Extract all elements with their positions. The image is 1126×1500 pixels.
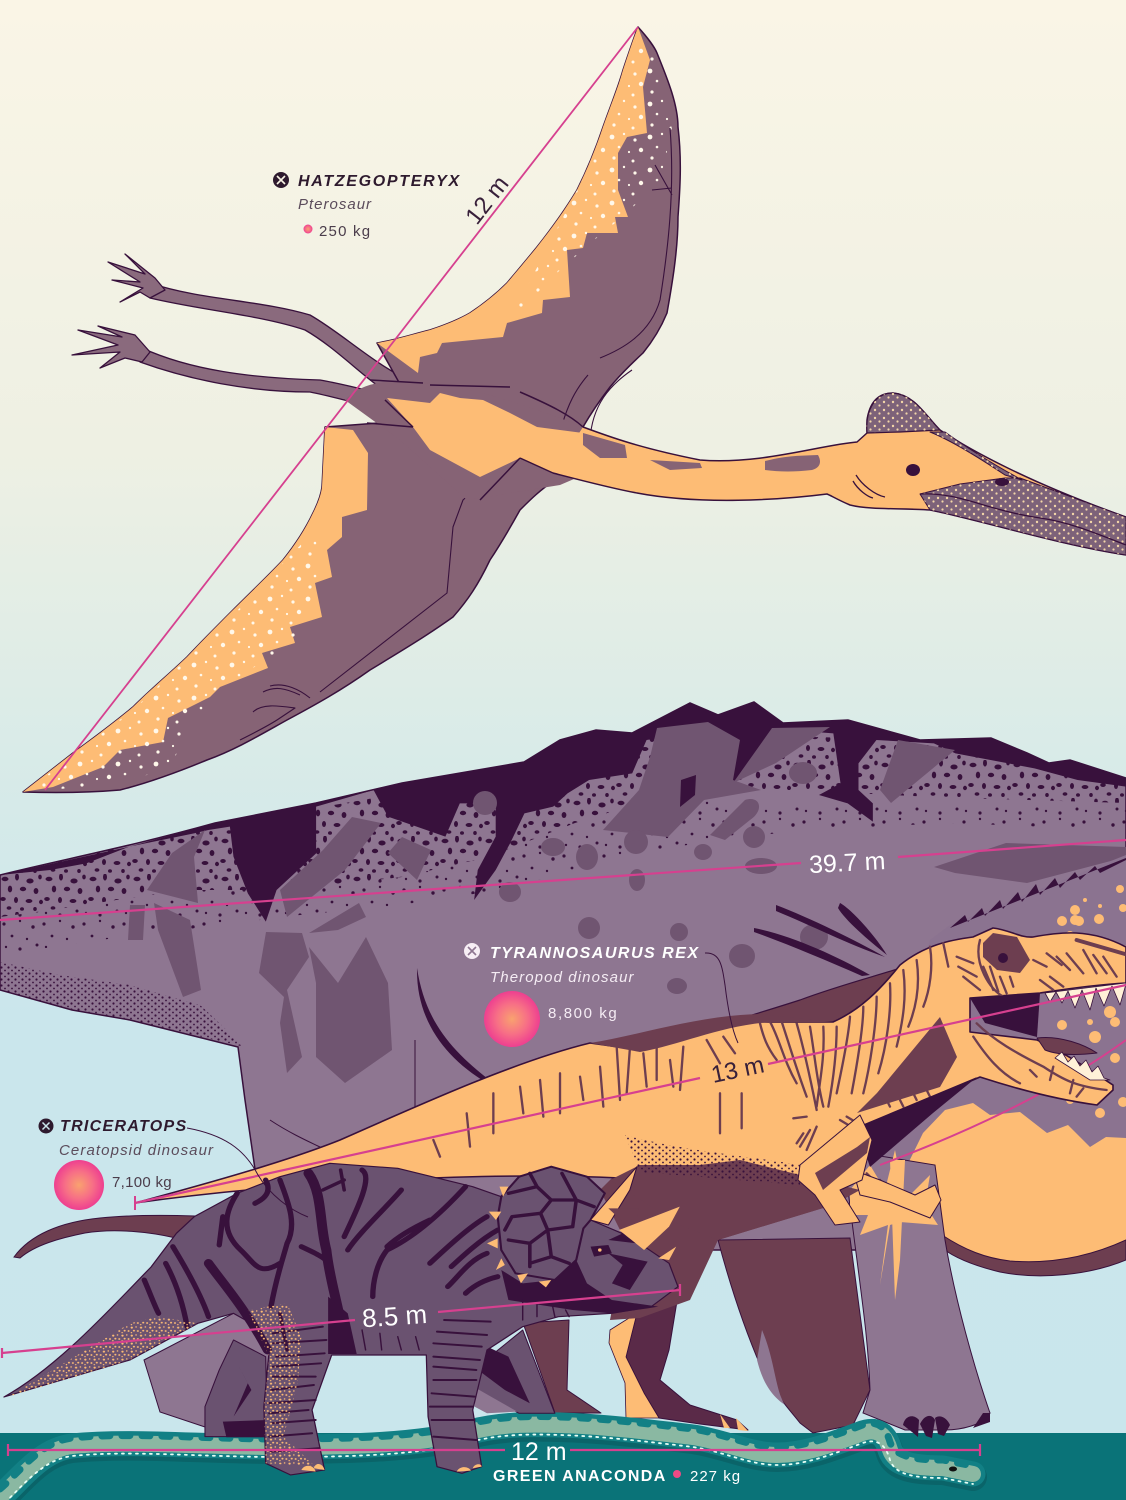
beak speckled (920, 432, 1126, 555)
brown far leg (718, 1238, 870, 1433)
body stripes (144, 1170, 498, 1350)
crest speckled (867, 393, 940, 433)
dense stipple on back (0, 733, 1126, 917)
eye patch (983, 933, 1030, 973)
belly block (328, 1297, 357, 1354)
round spots (473, 762, 828, 994)
upper wing orange band (377, 27, 650, 373)
brown back hump (640, 965, 910, 1060)
hide line (270, 1040, 415, 1160)
label: tyrannosaurus rex (464, 943, 738, 1047)
label: triceratops: TRICERATOPS (60, 1118, 188, 1135)
second sauropod arc measure (880, 1040, 1126, 1165)
upper wing tip speckles (510, 30, 672, 320)
frill spikes (487, 1187, 551, 1287)
second sauropod (640, 855, 1126, 1276)
stippled belly shading (610, 1160, 833, 1240)
teeth (1045, 983, 1126, 1080)
chest shadow (857, 1077, 977, 1167)
neck patches (583, 433, 820, 472)
sauropod measure 39.7 m (0, 840, 1126, 920)
neck dark (501, 1260, 658, 1313)
label: hatzegopteryx (273, 172, 461, 240)
green anaconda (0, 1417, 973, 1500)
back band (590, 1014, 833, 1052)
t. rex measure 13 m: 13 m (709, 1051, 767, 1089)
upper wing (377, 27, 680, 480)
label: green anaconda: GREEN ANACONDA (493, 1468, 667, 1485)
label: triceratops: Ceratopsid dinosaur (59, 1142, 214, 1159)
frill cells (505, 1173, 594, 1267)
lower wing (23, 420, 555, 793)
lavender back with ridge spikes (880, 855, 1126, 1250)
far arm (853, 1170, 941, 1218)
lower wing speckles (30, 530, 320, 790)
body (135, 928, 1126, 1203)
sparse stipple on flank (0, 800, 1126, 955)
leg wrinkles (267, 1320, 491, 1452)
body stripes (433, 940, 1125, 1215)
label: hatzegopteryx: 250 kg (319, 223, 371, 240)
anaconda measure 12 m (8, 1438, 980, 1466)
neck and head fill (553, 393, 1126, 555)
teal ground (0, 1433, 1126, 1500)
dark slashes (417, 775, 887, 1083)
t. rex measure 13 m (135, 985, 1126, 1203)
label: green anaconda: 227 kg (690, 1468, 741, 1485)
toes (301, 1464, 482, 1472)
t. rex illustration (135, 928, 1126, 1431)
leader line (187, 1128, 308, 1217)
torso (345, 381, 630, 500)
leg shading sliver (757, 1330, 785, 1405)
frill (498, 1167, 605, 1280)
orange leg strip (609, 1313, 659, 1418)
orange flank (900, 1103, 1126, 1262)
beak line, eye and jaw (853, 475, 1126, 545)
label: hatzegopteryx: Pterosaur (298, 196, 372, 213)
label: tyrannosaurus rex: TYRANNOSAURUS REX (490, 945, 700, 962)
body, tail and legs (4, 1163, 678, 1475)
sauropod far hind leg (144, 1313, 300, 1436)
open mouth (970, 993, 1040, 1037)
lavender front leg (843, 1150, 990, 1438)
label: triceratops: 7,100 kg (112, 1174, 172, 1191)
face markings (591, 1233, 648, 1290)
lower wing orange band (23, 427, 368, 792)
brown shoulder patch (857, 1017, 957, 1113)
giant sauropod body (0, 702, 1126, 1250)
tongue (1037, 1037, 1097, 1055)
neck wrinkles (362, 1300, 569, 1350)
icon: extinct marker (464, 943, 480, 959)
icon: extinct marker (38, 1118, 54, 1134)
chest orange (387, 393, 640, 490)
anaconda measure 12 m: 12 m (511, 1438, 567, 1466)
far front leg (475, 1330, 555, 1413)
near leg brown stippled (626, 1260, 748, 1430)
darker patches (128, 722, 1126, 1083)
icon: extinct marker (273, 172, 289, 188)
orange speckle on haunch and tail (9, 1303, 316, 1467)
triceratops measure 8.5 m (2, 1284, 680, 1358)
orange dots (1057, 885, 1126, 1118)
hatzegopteryx illustration (23, 27, 1126, 793)
label: triceratops (38, 1118, 308, 1217)
leader line (705, 953, 738, 1043)
horns (591, 1167, 637, 1225)
near arm (798, 1115, 872, 1225)
label: tyrannosaurus rex: 8,800 kg (548, 1005, 618, 1022)
toe claws (903, 1413, 990, 1438)
brown belly band (942, 1235, 1126, 1276)
far hind leg (205, 1340, 267, 1437)
label: tyrannosaurus rex: Theropod dinosaur (490, 969, 635, 986)
triceratops measure 8.5 m: 8.5 m (361, 1299, 428, 1333)
sauropod measure 39.7 m: 39.7 m (808, 847, 886, 879)
far leg brown (523, 1320, 601, 1413)
tail tick (134, 1196, 136, 1210)
orange splotches (850, 1150, 938, 1300)
wing claw and inner lines (240, 485, 480, 740)
triceratops illustration (4, 1163, 680, 1475)
lower neck shading (0, 962, 245, 1047)
label: hatzegopteryx: HATZEGOPTERYX (298, 173, 461, 190)
neck outline (367, 380, 1126, 555)
underside (600, 1150, 860, 1320)
wingspan measure 12 m: 12 m (460, 171, 514, 230)
upper wing inner lines (562, 128, 672, 440)
rear legs and feet (72, 254, 420, 412)
wingspan measure 12 m (45, 27, 638, 790)
whip tail (14, 1215, 195, 1258)
dark back band (0, 702, 1126, 922)
